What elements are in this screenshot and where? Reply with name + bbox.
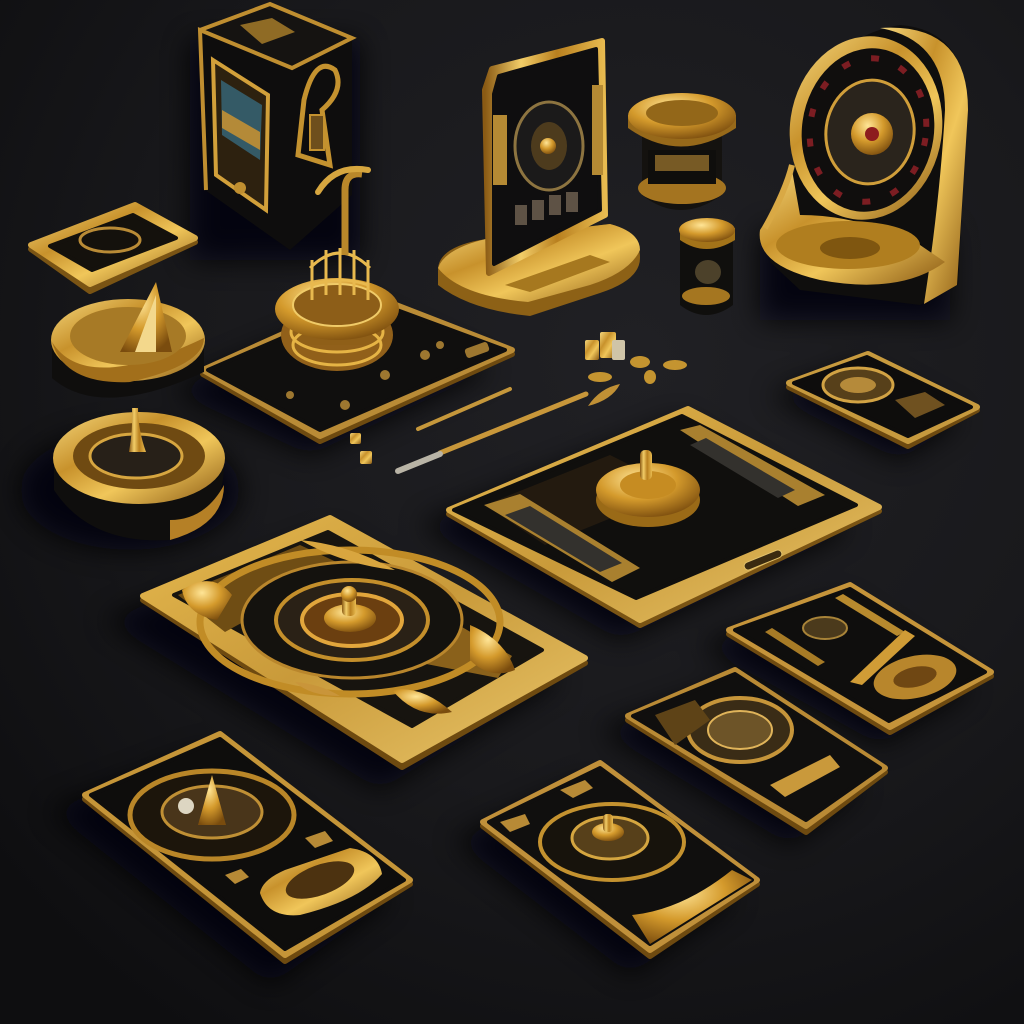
phone top right: [789, 354, 977, 446]
stacked gold drum: [628, 93, 736, 210]
wide tablet with dome: [449, 409, 879, 625]
gold dial with sail: [51, 282, 205, 398]
phone right middle: [729, 585, 991, 732]
cabinet screen: [213, 60, 268, 210]
phone bottom left: [85, 734, 410, 961]
gold dial with lever: [53, 408, 225, 540]
cabinet emblem: [298, 66, 338, 165]
tall black cabinet: [200, 4, 352, 250]
large gold tablet: [143, 518, 585, 767]
upright gold tablet on stand: [438, 41, 640, 316]
dice and coin pile: [585, 332, 687, 384]
gold carousel: [275, 169, 399, 371]
small tray: [31, 205, 195, 291]
gold dome: [596, 450, 700, 527]
phone center right: [628, 670, 885, 832]
small dice: [350, 433, 372, 464]
interface strips: [484, 425, 825, 582]
board tablet with gold carousel: [203, 169, 512, 441]
gold pens: [398, 384, 620, 471]
phone bottom center: [483, 763, 757, 956]
small gold-capped jar: [679, 218, 735, 315]
roulette arch: [760, 25, 968, 305]
roulette wheel on tablet: [200, 550, 500, 694]
